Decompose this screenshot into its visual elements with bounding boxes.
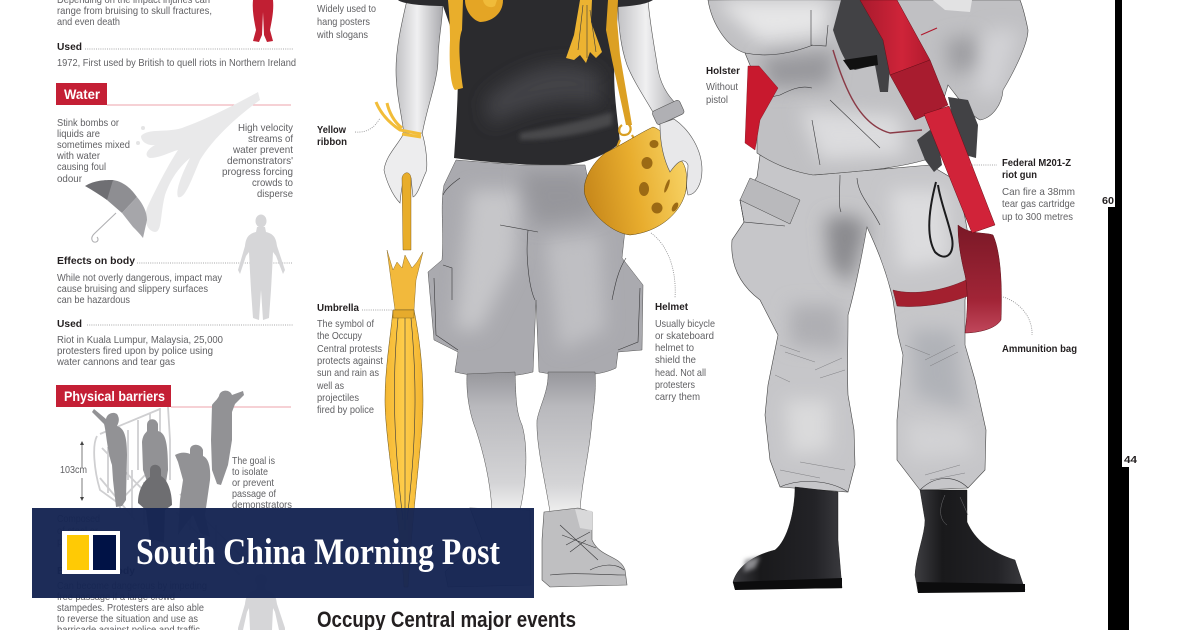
label: umbrella: protects against — [317, 355, 383, 367]
text: high velocity: crowds to — [252, 177, 293, 189]
text: posters: hang posters — [317, 16, 370, 28]
yellow ribbon — [376, 102, 421, 137]
illustration: protester silhouettes — [92, 391, 244, 543]
panel: physical barriers — [56, 385, 292, 630]
label: helmet: helmet to — [655, 342, 694, 354]
label: umbrella: sun and rain as — [317, 367, 379, 379]
text: barrier effects — [57, 580, 207, 630]
label: helmet: Usually bicycle — [655, 318, 715, 330]
label: helmet: Helmet — [655, 301, 688, 313]
text: barrier effects: to reverse the situation and use as — [57, 613, 198, 625]
label: yellow ribbon: Yellow — [317, 124, 347, 136]
heading: effects on body: Effects on body — [57, 565, 135, 577]
text: riot in Kuala Lumpur: protesters fired upon by police using — [57, 345, 213, 357]
text: posters: Widely used to — [317, 3, 376, 15]
label: helmet: head. Not all — [655, 367, 706, 379]
text: stink bombs — [56, 117, 130, 185]
panel: baton effects continued — [57, 0, 296, 69]
labels: protester callouts — [316, 3, 715, 416]
text: water effects: can be hazardous — [57, 294, 130, 306]
label: umbrella — [316, 302, 393, 416]
logotype: South China Morning Post — [136, 532, 501, 573]
heading: used: Used — [57, 41, 82, 53]
text: stink bombs: Stink bombs or — [57, 117, 119, 129]
text: composed of steel: plastic — [57, 536, 87, 548]
label: ammunition bag: Ammunition bag — [1002, 343, 1077, 355]
watch — [651, 99, 685, 126]
boot left — [445, 508, 531, 587]
ammunition bag — [958, 225, 1001, 333]
heading: used: Used — [57, 318, 82, 330]
text: riot in Kuala Lumpur: water cannons and tear gas — [56, 356, 175, 368]
text: high velocity: progress forcing — [222, 166, 293, 178]
label: umbrella: the Occupy — [317, 330, 363, 342]
text: water effects — [57, 272, 223, 306]
icon: red body silhouette legs — [253, 0, 273, 42]
text: goal: to isolate — [232, 466, 268, 478]
icon: body silhouette — [238, 214, 285, 320]
label: ammunition bag — [1002, 297, 1077, 355]
icon: height arrow 103cm — [60, 441, 87, 501]
text: posters — [316, 3, 376, 41]
hand left — [384, 133, 427, 203]
label: riot gun: Can fire a 38mm — [1002, 186, 1075, 198]
icon: body silhouette lower — [238, 574, 285, 630]
gun sling — [833, 50, 922, 133]
t-shirt — [398, 0, 653, 165]
text: water effects: cause bruising and slippery surfaces — [57, 283, 208, 295]
text: composed of steel — [57, 513, 100, 548]
text: barrier effects: Can become dangerous by impeding — [57, 580, 207, 592]
illustration: protester figure — [376, 0, 702, 587]
hand right — [660, 119, 702, 195]
text: stink bombs: with water — [56, 150, 100, 162]
icon: umbrella — [85, 180, 147, 242]
text: high velocity: streams of — [248, 133, 293, 145]
label: riot gun: up to 300 metres — [1002, 211, 1073, 223]
chart: timeline age bars — [1101, 0, 1138, 630]
boot right — [542, 508, 627, 587]
illustration: riot police figure — [708, 0, 1028, 593]
label: holster: Holster — [706, 65, 740, 77]
text: barrier effects: stampedes. Protesters are also able — [57, 602, 204, 614]
label: helmet: carry them — [655, 391, 700, 403]
text: baton injuries: range from bruising to skull fractures, — [57, 5, 212, 17]
text: goal: or prevent — [232, 477, 274, 489]
helmet — [584, 127, 687, 235]
umbrella — [385, 173, 423, 587]
holster — [745, 66, 778, 150]
text: goal: demonstrators — [232, 499, 292, 511]
text: composed of steel: of steel or — [57, 525, 98, 537]
text: riot in Kuala Lumpur: Riot in Kuala Lumpur, Malaysia, 25,000 — [57, 334, 223, 346]
lanyard — [929, 182, 953, 257]
label: yellow ribbon — [317, 118, 380, 148]
label: helmet: shield the — [655, 354, 696, 366]
text: riot in Kuala Lumpur — [56, 334, 223, 368]
label: riot gun: Federal M201-Z — [1002, 157, 1072, 169]
leg right — [537, 372, 595, 512]
shorts — [428, 160, 643, 376]
boot right — [915, 490, 1025, 593]
label: holster — [706, 65, 740, 106]
icon: water jet — [136, 92, 260, 232]
text: first used: 1972, First used by British to quell riots in Northern Ireland — [57, 57, 296, 69]
label: helmet: protesters — [655, 379, 695, 391]
label: holster: pistol — [706, 94, 728, 106]
label: umbrella: Umbrella — [317, 302, 359, 314]
riot gun — [860, 0, 995, 233]
icon: height arrow 103cm: 103cm — [60, 464, 87, 476]
label: riot gun — [970, 157, 1075, 223]
illustration: barrier back — [94, 407, 245, 575]
text: high velocity: demonstrators' — [227, 155, 293, 167]
boot left — [733, 487, 842, 590]
text: water effects: While not overly dangerous, impact may — [57, 272, 223, 284]
labels: police callouts — [706, 65, 1077, 355]
chart: timeline age bars: 44 — [1124, 454, 1137, 466]
arm right — [618, 0, 680, 125]
heading: water — [56, 83, 291, 105]
label: umbrella: The symbol of — [317, 318, 374, 330]
logo — [62, 531, 120, 574]
label: umbrella: well as — [316, 380, 344, 392]
label: umbrella: projectiles — [317, 392, 359, 404]
label: riot gun: riot gun — [1002, 169, 1037, 181]
label: holster: Without — [706, 81, 738, 93]
heading: effects on body: Effects on body — [57, 255, 135, 267]
text: high velocity — [222, 122, 294, 200]
text: barrier effects: free passage if a large crowd — [57, 591, 175, 603]
trousers — [732, 155, 986, 492]
heading: physical barriers: Physical barriers — [64, 388, 165, 404]
text: high velocity: High velocity — [238, 122, 294, 134]
text: high velocity: disperse — [257, 188, 293, 200]
text: high velocity: water prevent — [232, 144, 293, 156]
heading: physical barriers — [56, 385, 291, 407]
label: umbrella: fired by police — [317, 404, 374, 416]
text: stink bombs: sometimes mixed — [57, 139, 130, 151]
banner: South China Morning Post — [32, 508, 534, 598]
arm left — [396, 0, 443, 135]
text: baton injuries — [57, 0, 212, 28]
gloves — [833, 0, 978, 172]
text: baton injuries: and even death — [57, 16, 120, 28]
label: umbrella: Central protests — [317, 343, 382, 355]
panel: water — [56, 83, 294, 368]
text: stink bombs: liquids are — [57, 128, 100, 140]
label: riot gun: tear gas cartridge — [1002, 198, 1075, 210]
leg strap — [893, 280, 968, 307]
text: composed of steel: Composed — [57, 513, 100, 525]
label: yellow ribbon: ribbon — [317, 136, 347, 148]
text: stink bombs: causing foul — [57, 161, 106, 173]
label: helmet — [651, 233, 715, 403]
leg left — [467, 372, 526, 510]
text: goal: The goal is — [232, 455, 275, 467]
text: posters: with slogans — [316, 29, 368, 41]
text: goal: passage of — [232, 488, 276, 500]
text: stink bombs: odour — [57, 173, 82, 185]
chart: timeline age bars: 60 — [1102, 195, 1114, 207]
yellow rope and tassels — [448, 0, 640, 155]
heading: water: Water — [64, 86, 101, 102]
jacket — [708, 0, 1028, 175]
label: helmet: or skateboard — [655, 330, 714, 342]
text: goal — [232, 455, 292, 511]
